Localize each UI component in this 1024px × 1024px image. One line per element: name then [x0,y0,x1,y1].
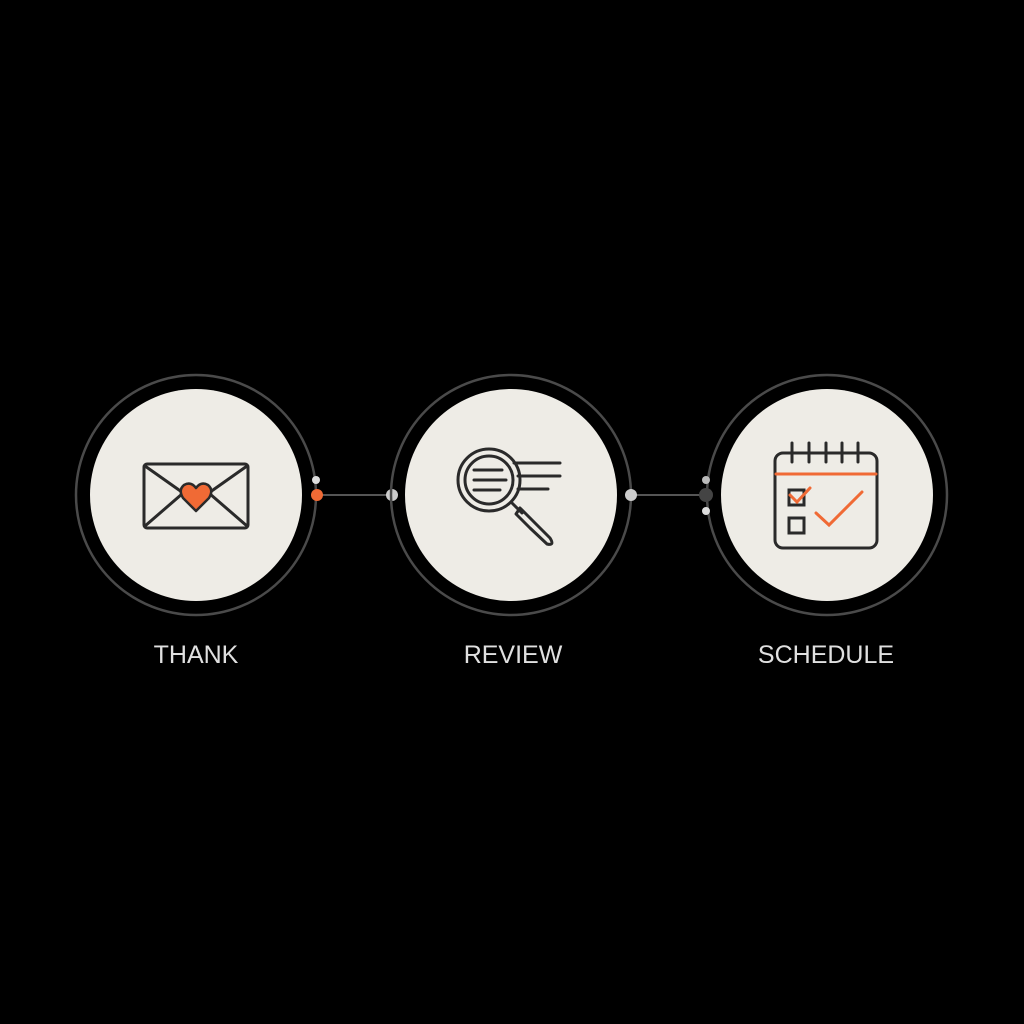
icon: magnifier [458,449,560,544]
icon: envelope with heart [144,464,248,528]
label: THANK: THANK [154,641,239,669]
label: SCHEDULE: SCHEDULE [758,641,894,669]
connector line 2 [632,494,706,496]
label: REVIEW: REVIEW [464,641,563,669]
connector line 1 [318,494,392,496]
step: thank [76,375,398,669]
step: review [391,375,637,669]
icon: calendar [775,443,877,548]
step: schedule [699,375,947,669]
connector dots [312,476,320,484]
